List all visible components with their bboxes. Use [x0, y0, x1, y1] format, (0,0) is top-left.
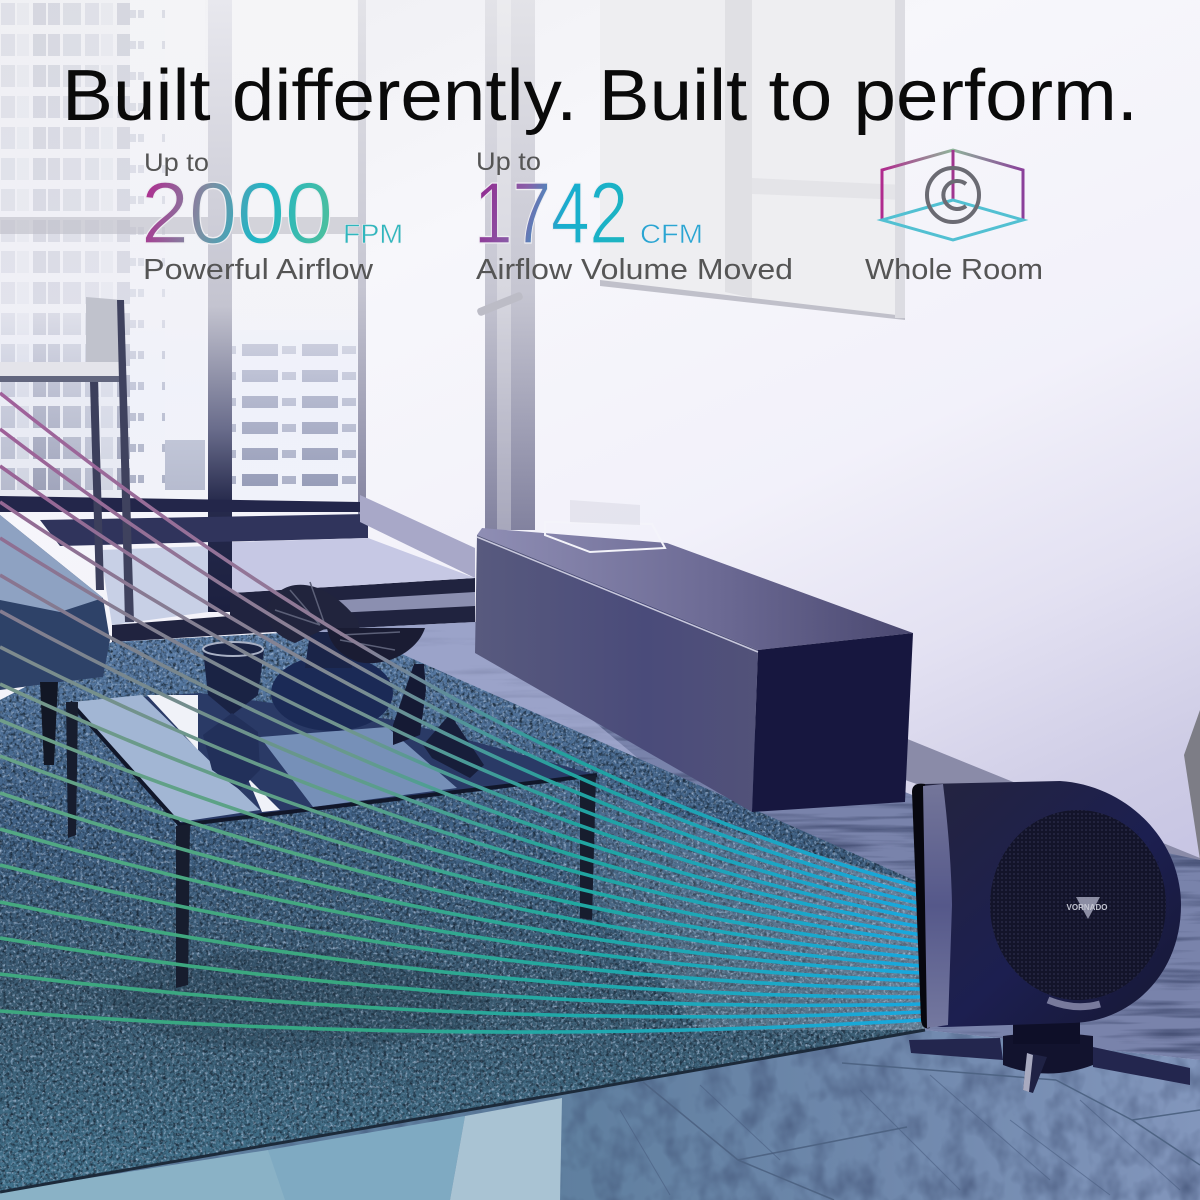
icon: room cube: [882, 150, 1023, 240]
stat: 1742 CFM: CFM: [640, 219, 703, 249]
stat: 1742 CFM: Airflow Volume Moved: [476, 254, 793, 286]
bar stool: [0, 297, 134, 622]
fan outlet slot: [912, 784, 930, 1028]
big vase: [271, 632, 393, 731]
fan base: [909, 1018, 1190, 1093]
cup and reflection: [203, 642, 264, 790]
stat: 2000 FPM: Up to: [144, 149, 209, 177]
stat: whole room: Whole Room: [865, 254, 1043, 286]
stat: 1742 CFM: [474, 148, 793, 286]
armchair: [0, 515, 110, 765]
stat: 1742 CFM: 1742: [474, 165, 628, 262]
airflow lines: [0, 393, 922, 1032]
wall baseboard: [905, 738, 1200, 880]
chair at right edge: [1184, 710, 1200, 860]
fan grille: [990, 810, 1166, 1000]
stat: 2000 FPM: FPM: [343, 219, 403, 249]
rug: [0, 632, 925, 1192]
fan: [909, 781, 1190, 1093]
sideboard: [475, 500, 913, 812]
coffee table: [66, 693, 597, 988]
logo: VORNADO: [1067, 903, 1107, 912]
terrace floor and baseboard: [100, 495, 475, 625]
stat: 1742 CFM: Up to: [476, 148, 541, 176]
fan side band: [923, 784, 952, 1028]
window with city buildings: [0, 0, 360, 520]
figure sculpture: [393, 664, 484, 778]
stat: 2000 FPM: Powerful Airflow: [143, 254, 374, 286]
fan housing: [922, 781, 1181, 1027]
title: Built differently. Built to perform.: [62, 56, 1138, 136]
vases and sculptures: [203, 582, 484, 790]
fan-shaped leaves: [267, 582, 425, 663]
faint picture frame on wall: [600, 0, 905, 320]
stat: 2000 FPM: [141, 149, 403, 286]
logo: [1067, 897, 1107, 919]
upper floor: [274, 622, 1200, 1060]
lower floor tiles: [0, 1030, 1200, 1200]
window columns and frame: [0, 0, 535, 642]
stat: whole room: [865, 150, 1043, 286]
stat: 2000 FPM: 2000: [141, 165, 333, 262]
grille ring highlight: [1048, 1000, 1100, 1007]
